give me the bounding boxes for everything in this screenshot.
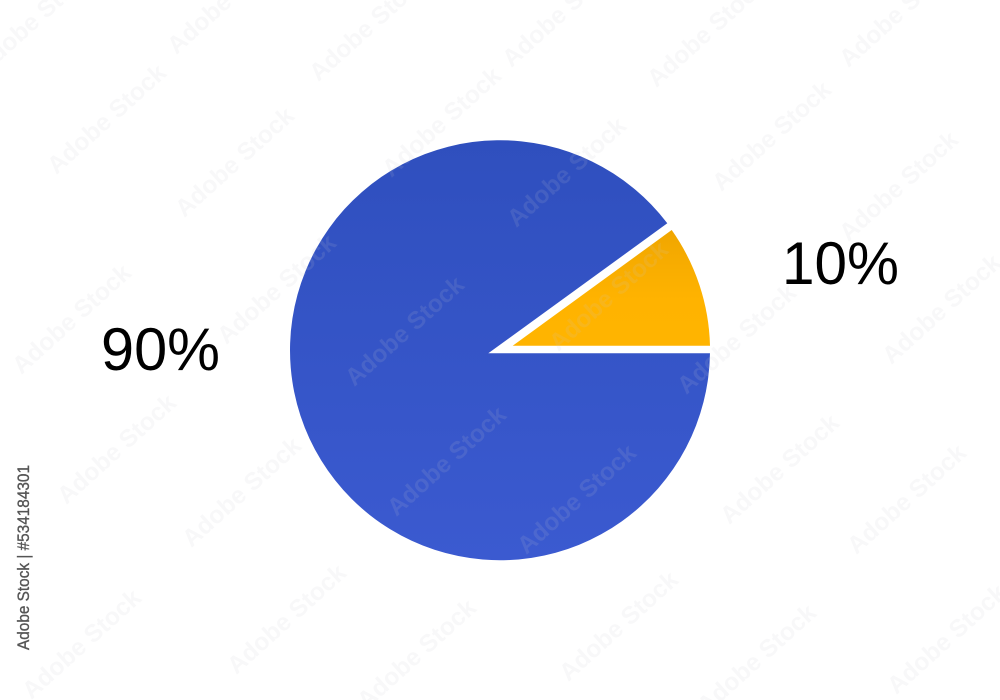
watermark pattern: Adobe Stock (177, 432, 307, 553)
pie chart (290, 140, 710, 560)
watermark pattern: Adobe Stock (212, 229, 342, 350)
watermark pattern: Adobe Stock (672, 279, 802, 400)
label: 90%: 90% (101, 316, 220, 383)
watermark pattern: Adobe Stock (544, 236, 674, 357)
watermark pattern: Adobe Stock (502, 112, 632, 233)
stock image id: Adobe Stock | #534184301 (14, 465, 33, 650)
watermark pattern: Adobe Stock (340, 271, 470, 392)
watermark pattern: Adobe Stock (377, 62, 507, 183)
watermark pattern: Adobe Stock (52, 389, 182, 510)
watermark pattern: Adobe Stock (554, 566, 684, 687)
slice: 10% orange (513, 230, 710, 346)
watermark pattern: Adobe Stock (42, 59, 172, 180)
watermark pattern: Adobe Stock (7, 259, 137, 380)
watermark pattern: Adobe Stock (170, 102, 300, 223)
watermark pattern: Adobe Stock (382, 401, 512, 522)
watermark pattern: Adobe Stock (512, 439, 642, 560)
label: 10%: 10% (782, 230, 899, 297)
watermark pattern: Adobe Stock (715, 409, 845, 530)
watermark pattern: Adobe Stock (222, 559, 352, 680)
watermark pattern: Adobe Stock (842, 439, 972, 560)
watermark pattern: Adobe Stock (834, 126, 964, 247)
watermark pattern: Adobe Stock (707, 76, 837, 197)
slice: 90% blue (290, 140, 710, 560)
